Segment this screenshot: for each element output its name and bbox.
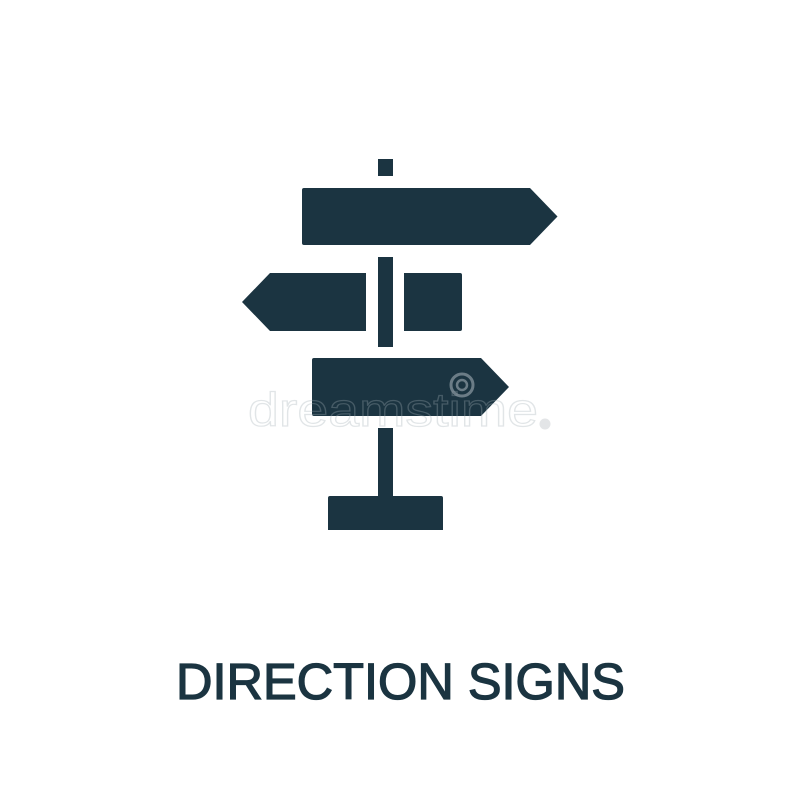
watermark: dreamstime: [248, 383, 538, 436]
icon: direction signs: [242, 159, 558, 530]
watermark: [248, 374, 550, 436]
title: DIRECTION SIGNS: [176, 653, 625, 710]
